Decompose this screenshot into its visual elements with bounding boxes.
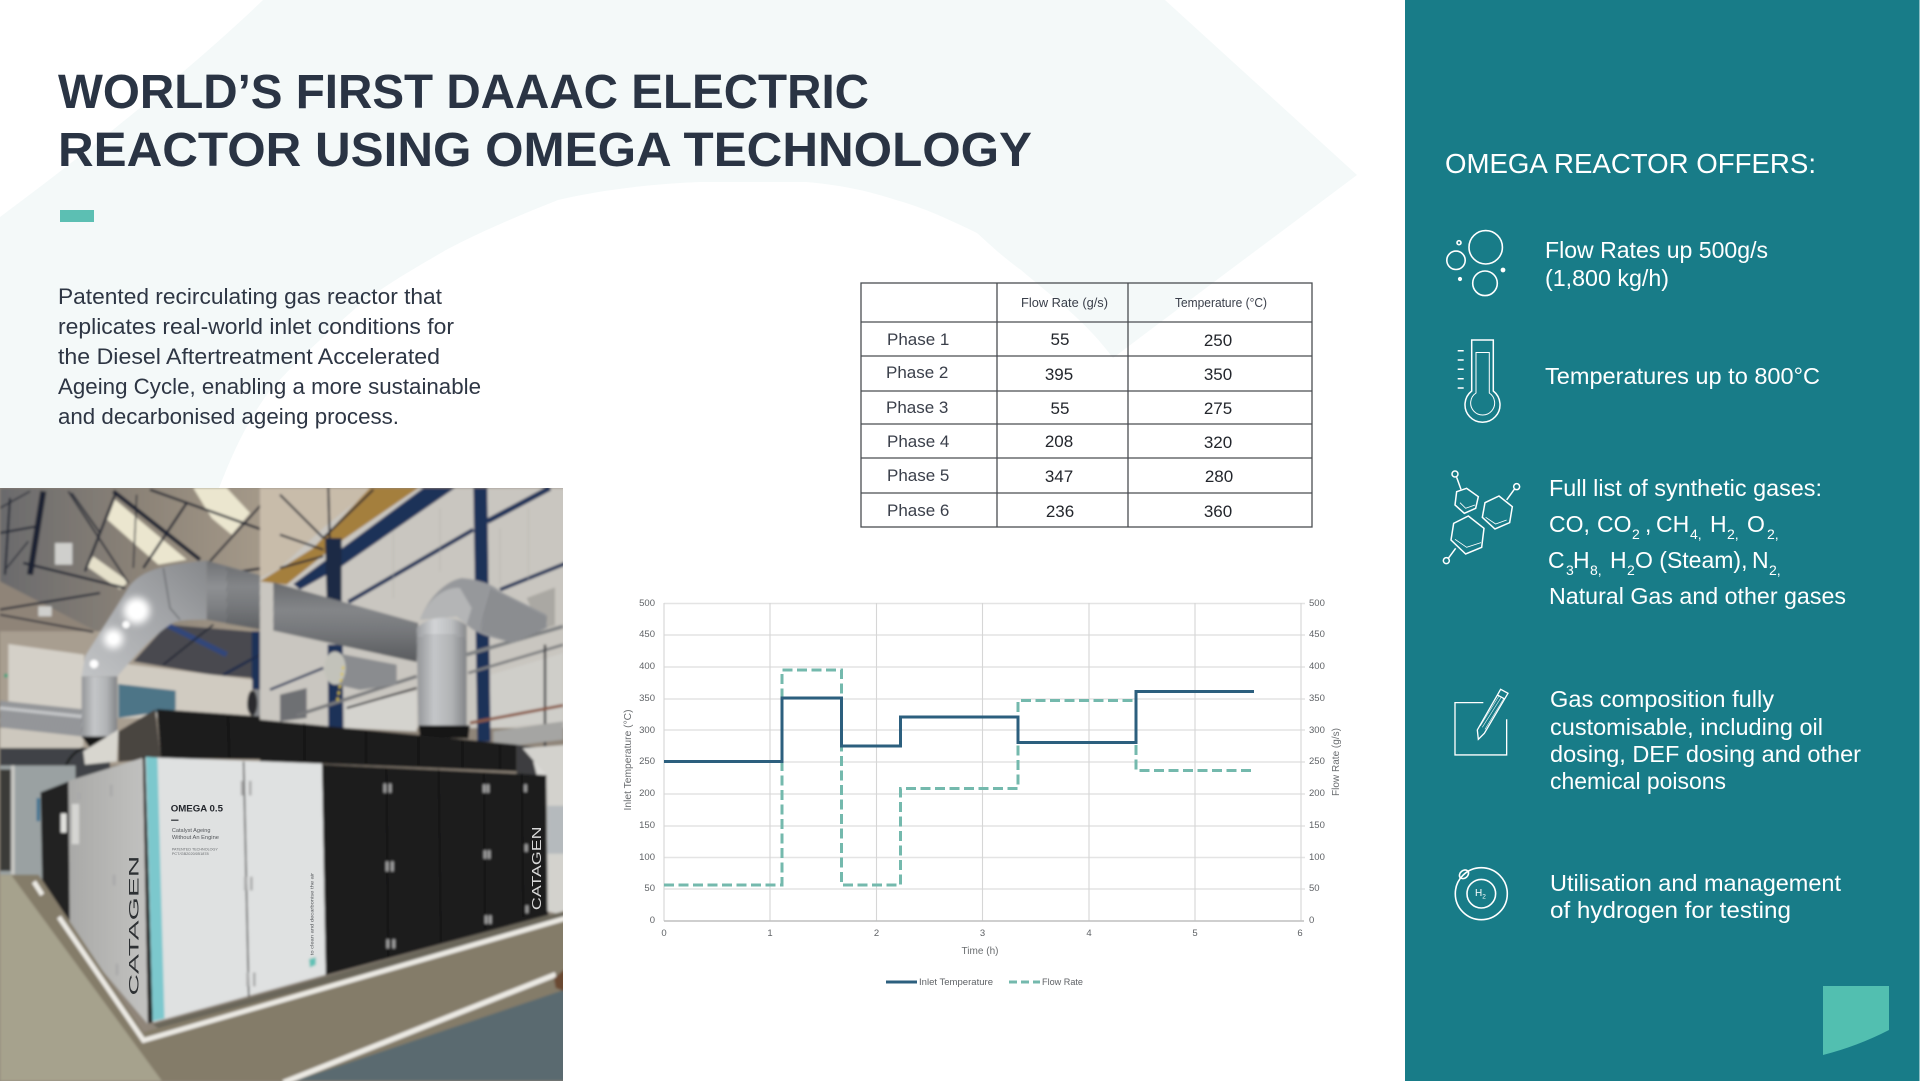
reactor signage: to clean and decarbonise the air — [310, 872, 315, 955]
reactor signage: CATAGEN — [529, 827, 544, 910]
text: hydrogen: of hydrogen for testing — [1550, 897, 1791, 923]
title: WORLD’S FIRST DAAAC ELECTRIC — [58, 66, 869, 119]
y axis left labels: 250 — [639, 756, 655, 767]
table values — [1045, 330, 1233, 521]
y axis right labels — [1309, 598, 1325, 926]
text: flow rates: Flow Rates up 500g/s — [1545, 237, 1768, 263]
y axis right labels: 100 — [1309, 852, 1325, 863]
accent bar — [60, 210, 94, 222]
y axis left labels: 150 — [639, 820, 655, 831]
text: flow rates: (1,800 kg/h) — [1545, 265, 1669, 291]
text: synthetic gases: CO, — [1549, 511, 1590, 537]
table header: Temperature (°C) — [1175, 296, 1267, 310]
table rows: Phase 2 — [886, 363, 948, 382]
title — [58, 66, 1032, 177]
text: flow rates — [1545, 237, 1768, 291]
photo: Omega reactor installation — [0, 470, 590, 1081]
x axis labels — [661, 928, 1303, 939]
intro text: Ageing Cycle, enabling a more sustainable — [58, 374, 481, 399]
y axis left labels: 350 — [639, 693, 655, 704]
text: synthetic gases: 2, — [1769, 562, 1781, 578]
table values: 250 — [1204, 331, 1232, 350]
intro text: Patented recirculating gas reactor that — [58, 284, 443, 309]
intro text: and decarbonised ageing process. — [58, 404, 399, 429]
y axis right labels: 450 — [1309, 629, 1325, 640]
x axis labels: 6 — [1297, 928, 1303, 939]
icon: hydrogen atom: 2 — [1482, 894, 1486, 900]
legend — [886, 977, 1083, 988]
series: inlet temperature — [664, 692, 1254, 762]
axis titles: Flow Rate (g/s) — [1331, 728, 1342, 796]
x axis labels: 2 — [874, 928, 879, 939]
text: synthetic gases: 2, — [1767, 526, 1779, 542]
text: synthetic gases: CH — [1656, 511, 1689, 537]
text: hydrogen — [1550, 870, 1842, 923]
y axis left labels: 200 — [639, 788, 655, 799]
y axis right labels: 350 — [1309, 693, 1325, 704]
axis titles: Time (h) — [962, 946, 998, 957]
y axis left labels: 450 — [639, 629, 655, 640]
text: gas composition: chemical poisons — [1550, 768, 1726, 794]
text: synthetic gases: 2 — [1632, 526, 1640, 542]
text: synthetic gases: H — [1610, 547, 1627, 573]
text: hydrogen: Utilisation and management — [1550, 870, 1842, 896]
table rows — [886, 330, 949, 520]
table values: 55 — [1051, 399, 1069, 418]
line chart — [623, 598, 1342, 988]
x axis labels: 4 — [1086, 928, 1092, 939]
table values: 360 — [1204, 502, 1232, 521]
title: REACTOR USING OMEGA TECHNOLOGY — [58, 124, 1032, 177]
text: synthetic gases: O (Steam), — [1635, 547, 1747, 573]
reactor signage: CATAGEN — [127, 856, 142, 996]
series: flow rate — [664, 670, 1254, 885]
text: gas composition: dosing, DEF dosing and other — [1550, 741, 1861, 767]
table values: 275 — [1204, 399, 1232, 418]
y axis left labels: 50 — [644, 883, 655, 894]
x axis labels: 5 — [1192, 928, 1198, 939]
y axis right labels: 500 — [1309, 598, 1325, 609]
icon: pencil and square — [1455, 689, 1508, 755]
y axis right labels: 0 — [1309, 915, 1314, 926]
table rows: Phase 4 — [887, 432, 949, 451]
text: gas composition — [1550, 686, 1861, 794]
text: synthetic gases: , — [1645, 511, 1651, 537]
reactor signage: Without An Engine — [172, 835, 219, 841]
y axis right labels: 250 — [1309, 756, 1325, 767]
table header — [1021, 296, 1267, 310]
y axis right labels: 300 — [1309, 725, 1325, 736]
text: synthetic gases: Natural Gas and other gases — [1549, 583, 1846, 609]
legend: Inlet Temperature — [919, 977, 993, 988]
reactor signage: OMEGA 0.5 — [171, 803, 223, 814]
y axis right labels: 400 — [1309, 661, 1325, 672]
y axis right labels: 150 — [1309, 820, 1325, 831]
table values: 236 — [1046, 502, 1074, 521]
y axis left labels: 0 — [650, 915, 655, 926]
table values: 280 — [1205, 467, 1233, 486]
panel heading: OMEGA REACTOR OFFERS: — [1445, 148, 1816, 179]
reactor signage: PATENTED TECHNOLOGY — [172, 847, 219, 851]
data table — [861, 283, 1312, 527]
text: synthetic gases: O — [1747, 511, 1765, 537]
y axis left labels: 100 — [639, 852, 655, 863]
text: synthetic gases — [1548, 475, 1846, 609]
y axis left labels: 300 — [639, 725, 655, 736]
y axis right labels: 200 — [1309, 788, 1325, 799]
legend: Flow Rate — [1042, 977, 1083, 988]
y axis left labels: 500 — [639, 598, 655, 609]
y axis left labels: 400 — [639, 661, 655, 672]
icon: bubbles — [1447, 231, 1505, 296]
text: synthetic gases: H — [1573, 547, 1590, 573]
reactor signage — [127, 803, 544, 996]
reactor signage: PCT/GB2020/051878 — [172, 852, 209, 856]
text: synthetic gases: H — [1710, 511, 1727, 537]
text: gas composition: customisable, including oil — [1550, 714, 1823, 740]
y axis left labels — [639, 598, 655, 926]
table values: 320 — [1204, 433, 1232, 452]
x axis labels: 0 — [661, 928, 667, 939]
icon: hydrogen atom: H — [1475, 888, 1482, 899]
x axis labels: 1 — [767, 928, 773, 939]
text: synthetic gases: N — [1752, 547, 1769, 573]
text: synthetic gases: CO — [1597, 511, 1632, 537]
text: synthetic gases: C — [1548, 547, 1565, 573]
table values: 350 — [1204, 365, 1232, 384]
icon: hydrogen atom — [1455, 868, 1507, 920]
logo mark — [1823, 986, 1889, 1055]
text: synthetic gases: 2, — [1727, 526, 1739, 542]
text: synthetic gases: 8, — [1590, 562, 1602, 578]
reactor signage: Catalyst Ageing — [172, 828, 211, 834]
text: gas composition: Gas composition fully — [1550, 686, 1775, 712]
panel: omega reactor offers — [1405, 0, 1920, 1081]
table values: 55 — [1051, 330, 1069, 349]
x axis labels: 3 — [980, 928, 985, 939]
intro text: replicates real-world inlet conditions for — [58, 314, 455, 339]
table header: Flow Rate (g/s) — [1021, 296, 1108, 310]
text: synthetic gases: Full list of synthetic gases: — [1549, 475, 1822, 501]
y axis right labels: 50 — [1309, 883, 1320, 894]
text: synthetic gases: 4, — [1690, 526, 1702, 542]
axis titles: Inlet Temperature (°C) — [623, 710, 634, 810]
intro text — [58, 284, 481, 429]
icon: molecules — [1443, 471, 1520, 564]
table rows: Phase 6 — [887, 501, 949, 520]
axis titles — [623, 710, 1342, 957]
table rows: Phase 5 — [887, 466, 949, 485]
text: synthetic gases: 2 — [1627, 562, 1635, 578]
intro text: the Diesel Aftertreatment Accelerated — [58, 344, 440, 369]
table rows: Phase 1 — [887, 330, 949, 349]
table values: 208 — [1045, 432, 1073, 451]
background brush shape — [0, 0, 1357, 488]
text: synthetic gases: 3 — [1566, 562, 1574, 578]
table values: 395 — [1045, 365, 1073, 384]
table values: 347 — [1045, 467, 1073, 486]
text: temperatures: Temperatures up to 800°C — [1545, 363, 1820, 389]
icon: thermometer — [1458, 340, 1500, 422]
table rows: Phase 3 — [886, 398, 948, 417]
